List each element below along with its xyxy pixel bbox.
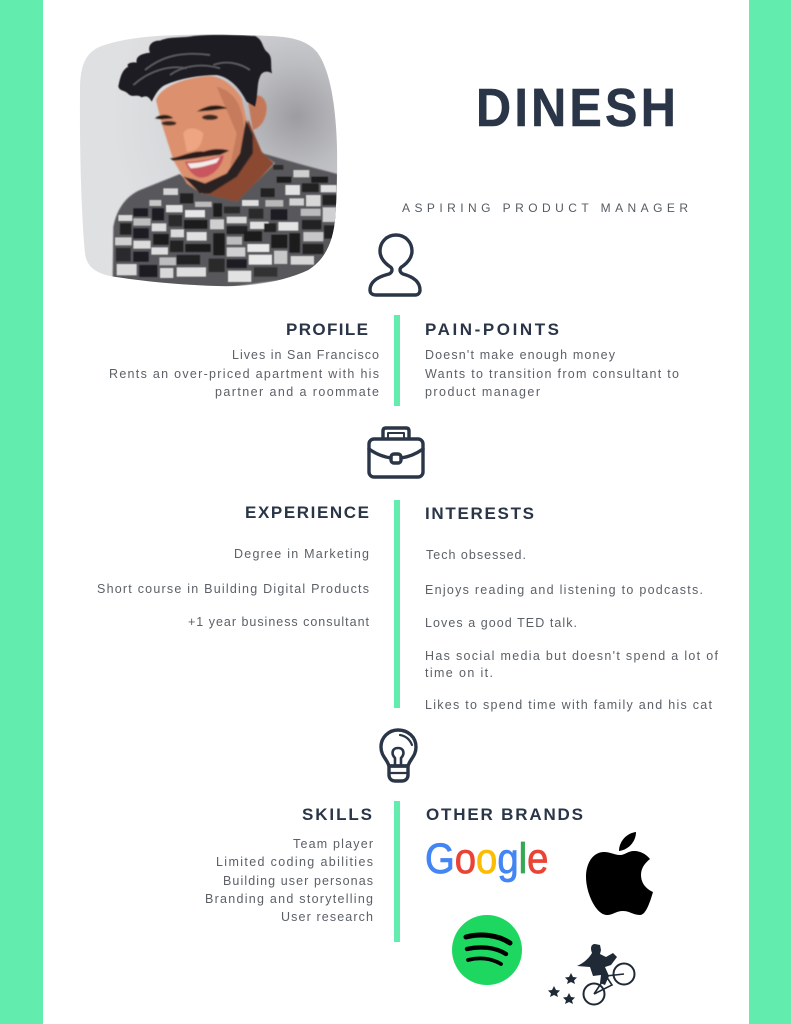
pain-points text: product manager <box>425 385 540 399</box>
interests text: Loves a good TED talk. <box>425 616 577 630</box>
pain-points text: Doesn't make enough money <box>425 348 616 362</box>
icon: briefcase <box>369 428 423 477</box>
heading: experience: EXPERIENCE <box>245 503 369 522</box>
experience text <box>97 547 370 629</box>
interests text: Tech obsessed. <box>426 548 526 562</box>
pain-points text: Wants to transition from consultant to <box>425 367 679 381</box>
interests text: Enjoys reading and listening to podcasts. <box>425 583 703 597</box>
skills text <box>205 837 373 924</box>
experience text: +1 year business consultant <box>188 615 370 629</box>
panel: experience <box>97 503 370 629</box>
portrait photo <box>80 34 338 286</box>
profile text: Rents an over-priced apartment with his <box>109 367 379 381</box>
panel: skills <box>205 805 373 924</box>
heading: pain-points: PAIN-POINTS <box>425 320 559 339</box>
divider bar 1 <box>394 315 400 406</box>
panel: pain-points <box>425 320 679 399</box>
panel: interests <box>425 504 719 712</box>
profile text <box>109 348 379 399</box>
interests text <box>425 548 719 712</box>
left green band <box>0 0 43 1024</box>
logo: Apple <box>586 832 653 915</box>
icon: person <box>370 235 420 295</box>
title: DINESH <box>476 77 676 138</box>
profile text: partner and a roommate <box>215 385 379 399</box>
interests text: Likes to spend time with family and his cat <box>425 698 713 712</box>
interests text: Has social media but doesn't spend a lot of <box>425 649 719 663</box>
skills text: User research <box>281 910 373 924</box>
divider bar 2 <box>394 500 400 708</box>
skills text: Branding and storytelling <box>205 892 373 906</box>
pain-points text <box>425 348 679 399</box>
subtitle: ASPIRING PRODUCT MANAGER <box>402 201 688 215</box>
right green band <box>749 0 791 1024</box>
logo: Spotify <box>452 915 522 985</box>
panel: profile <box>109 320 379 399</box>
skills text: Limited coding abilities <box>216 855 373 869</box>
experience text: Degree in Marketing <box>234 547 369 561</box>
logo: Postmates <box>548 944 634 1004</box>
interests text: time on it. <box>425 666 493 680</box>
panel: other brands <box>425 805 653 1004</box>
heading: skills: SKILLS <box>302 805 372 824</box>
experience text: Short course in Building Digital Products <box>97 582 369 596</box>
skills text: Team player <box>293 837 373 851</box>
heading: interests: INTERESTS <box>425 504 534 523</box>
heading: profile: PROFILE <box>286 320 368 339</box>
divider bar 3 <box>394 801 400 942</box>
icon: light bulb <box>381 730 416 781</box>
profile text: Lives in San Francisco <box>232 348 379 362</box>
skills text: Building user personas <box>223 874 373 888</box>
logo: Google: Google <box>425 834 548 883</box>
heading: other brands: OTHER BRANDS <box>426 805 583 824</box>
